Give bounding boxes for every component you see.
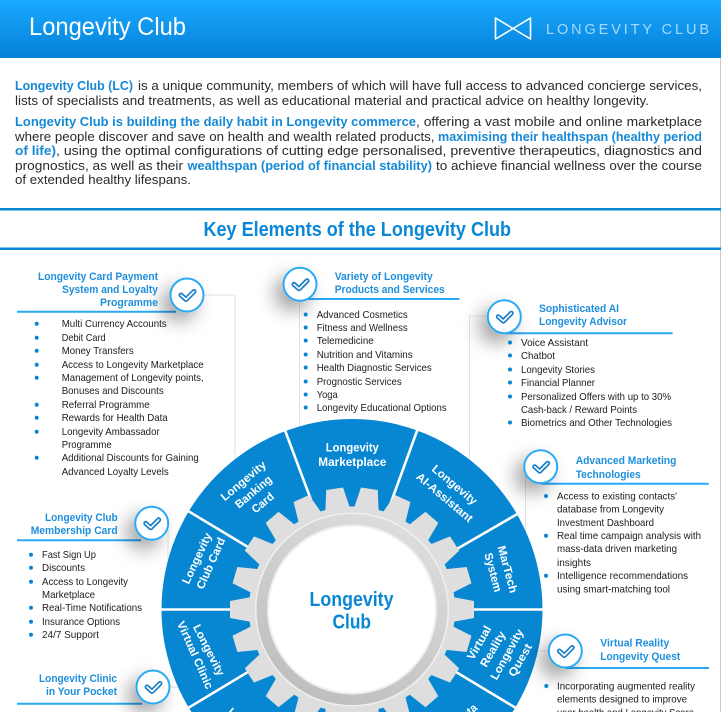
heading: Longevity Clinic [39, 673, 117, 685]
heading: Membership Card [31, 525, 118, 537]
heading: Technologies [576, 469, 641, 481]
icon: check badge [284, 268, 316, 301]
center label: Club [332, 612, 371, 634]
list: Additional Discounts for Gaining [62, 452, 199, 464]
header banner [0, 0, 721, 58]
heading: Products and Services [335, 284, 445, 296]
list [29, 549, 142, 641]
heading [576, 455, 676, 481]
heading [335, 271, 445, 296]
intro text block: is a unique community, members of which will have full access to advanced concierge services, [138, 78, 702, 93]
segment: Longevity Club Card: Longevity [181, 531, 215, 586]
heading: Longevity Card Payment [38, 271, 158, 283]
panel: Longevity Club Membership Card [17, 507, 168, 641]
intro text block: of life) [15, 143, 56, 158]
list: 24/7 Support [42, 629, 99, 641]
icon: check badge [488, 300, 521, 333]
list: Intelligence recommendations [557, 570, 688, 582]
heading: Programme [100, 297, 158, 309]
heading: Sophisticated AI [539, 303, 619, 315]
list [544, 490, 701, 596]
list: Rewards for Health Data [62, 412, 168, 424]
segment: Longevity Club Card: Club Card [195, 536, 228, 591]
list: Advanced Loyalty Levels [62, 466, 169, 478]
heading: in Your Pocket [46, 686, 117, 698]
segment: Longevity Virtual Clinic: Longevity [190, 623, 226, 679]
list: using smart-matching tool [557, 584, 670, 596]
list: Longevity Ambassador [62, 426, 160, 438]
heading [600, 638, 681, 663]
list: Health Diagnostic Services [317, 362, 432, 374]
segment: Longevity Virtual Clinic: Virtual Clinic [174, 620, 215, 692]
list: elements designed to improve [557, 694, 687, 706]
segment: Longevity AI-Assistant: Longevity [429, 463, 479, 508]
title: Longevity Club [29, 13, 186, 41]
list: Longevity Educational Options [317, 402, 447, 414]
heading [39, 673, 117, 698]
icon: check badge [136, 670, 170, 704]
heading [38, 271, 159, 309]
center label: Longevity [310, 589, 394, 611]
list: Debit Card [62, 332, 106, 344]
segment: Longevity Banking Card: Card [250, 491, 277, 516]
heading: Virtual Reality [600, 638, 670, 650]
list: Telemedicine [317, 335, 374, 347]
logo: Longevity Club: LONGEVITY CLUB [546, 22, 709, 38]
list: Prognostic Services [317, 376, 402, 388]
intro text block: Longevity Club is building the daily habit in Longevity commerce [15, 114, 416, 129]
heading [539, 303, 628, 328]
list: Money Transfers [62, 345, 134, 357]
segment: MarTech System: MarTech [495, 545, 519, 595]
section heading: Key Elements of the Longevity Club [204, 219, 511, 241]
logo: Longevity Club [496, 18, 709, 39]
heading: Longevity Club [45, 512, 118, 524]
icon: check badge [135, 507, 168, 540]
center label [310, 589, 394, 634]
list: Fitness and Wellness [317, 322, 408, 334]
list: Voice Assistant [521, 337, 588, 349]
segment: Longevity Banking Card: Banking [233, 474, 275, 511]
intro text block: lists of specialists and treatments, as well as educational material and practical advice on healthy longevity. [15, 93, 649, 108]
intro text block: where people discover and save on health and wealth related products, [14, 129, 434, 144]
segment: Longevity Banking Card: Longevity [219, 459, 269, 504]
segment: Longevity Marketplace: Longevity [326, 442, 379, 454]
segment: Longevity AI-Assistant: AI-Assistant [413, 471, 475, 525]
list: Financial Planner [521, 377, 595, 389]
segment: MarTech System [481, 545, 519, 595]
panel: Longevity Card Payment [17, 271, 204, 478]
segment: Virtual Reality Longevity Quest: Quest [507, 642, 535, 679]
list: Access to Longevity [42, 576, 129, 588]
heading: Longevity Advisor [539, 316, 628, 328]
list [508, 337, 672, 429]
list: Yoga [317, 389, 338, 401]
list: Access to Longevity Marketplace [62, 359, 204, 371]
segment: Longevity Club Card [181, 531, 228, 591]
intro text block: , using the optimal configurations of cutting edge personalised, preventive therapeutics, diagnostics and [56, 143, 702, 158]
heading: Variety of Longevity [335, 271, 434, 283]
intro text block: wealthspan (period of financial stability) [187, 158, 432, 173]
heading [31, 512, 118, 537]
list [304, 309, 447, 414]
segment: Virtual Reality Longevity Quest: Virtual [465, 624, 494, 662]
list: Real time campaign analysis with [557, 530, 701, 542]
heading: System and Loyalty [62, 284, 159, 296]
panel: Advanced Marketing Technologies [524, 450, 709, 596]
icon: check badge [170, 278, 204, 312]
list: Programme [62, 439, 112, 451]
list: Advanced Cosmetics [317, 309, 408, 321]
icon: check badge [549, 634, 582, 668]
list: Fast Sign Up [42, 549, 96, 561]
panel: Virtual Reality Longevity Quest [544, 634, 709, 712]
list: Discounts [42, 562, 85, 574]
segment: Virtual Reality Longevity Quest: Longevity [489, 627, 527, 682]
gear [230, 487, 474, 712]
intro text block: prognostics, as well as their [15, 158, 184, 173]
list: Cash-back / Reward Points [521, 404, 637, 416]
segment: Longevity Marketplace [318, 442, 386, 469]
list: mass-data driven marketing [557, 543, 677, 555]
list: Investment Dashboard [557, 517, 654, 529]
segment: Virtual Reality Longevity Quest [465, 624, 535, 682]
segment: Longevity Banking Card [219, 459, 277, 516]
list: Chatbot [521, 350, 555, 362]
list: database from Longevity [557, 503, 665, 515]
list: Referral Programme [62, 399, 150, 411]
list: Nutrition and Vitamins [317, 349, 413, 361]
panel: Longevity Clinic in Your Pocket [17, 670, 170, 704]
intro text block: Longevity Club (LC) [15, 78, 133, 93]
heading: Longevity Quest [600, 651, 681, 663]
list: insights [557, 557, 591, 569]
segment: Longevity Marketplace: Marketplace [318, 457, 386, 469]
list: Bonuses and Discounts [62, 385, 164, 397]
list: Real-Time Notifications [42, 602, 142, 614]
heading: Advanced Marketing [576, 455, 676, 467]
list: Access to existing contacts' [557, 490, 677, 502]
list: Multi Currency Accounts [62, 318, 167, 330]
wheel diagram [156, 419, 548, 712]
list: Longevity Stories [521, 364, 595, 376]
intro text block [14, 78, 702, 187]
list: Management of Longevity points, [62, 372, 204, 384]
segment: Virtual Reality Longevity Quest: Reality [479, 629, 509, 669]
list: Biometrics and Other Technologies [521, 417, 672, 429]
list: Marketplace [42, 589, 95, 601]
intro text block: of extended healthy lifespans. [15, 172, 191, 187]
panel: Sophisticated AI Advisor [488, 300, 673, 429]
list: Incorporating augmented reality [557, 680, 696, 692]
intro text block: maximising their healthspan (healthy period [438, 129, 702, 144]
list [35, 318, 204, 478]
intro text block: , offering a vast mobile and online marketplace [416, 114, 702, 129]
icon: check badge [524, 450, 557, 483]
list [544, 680, 696, 712]
segment: MarTech System: System [481, 552, 503, 593]
intro text block: to achieve financial wellness over the course [436, 158, 702, 173]
list: Insurance Options [42, 616, 120, 628]
panel: Variety of Longevity Products [284, 268, 459, 414]
list: Personalized Offers with up to 30% [521, 391, 671, 403]
